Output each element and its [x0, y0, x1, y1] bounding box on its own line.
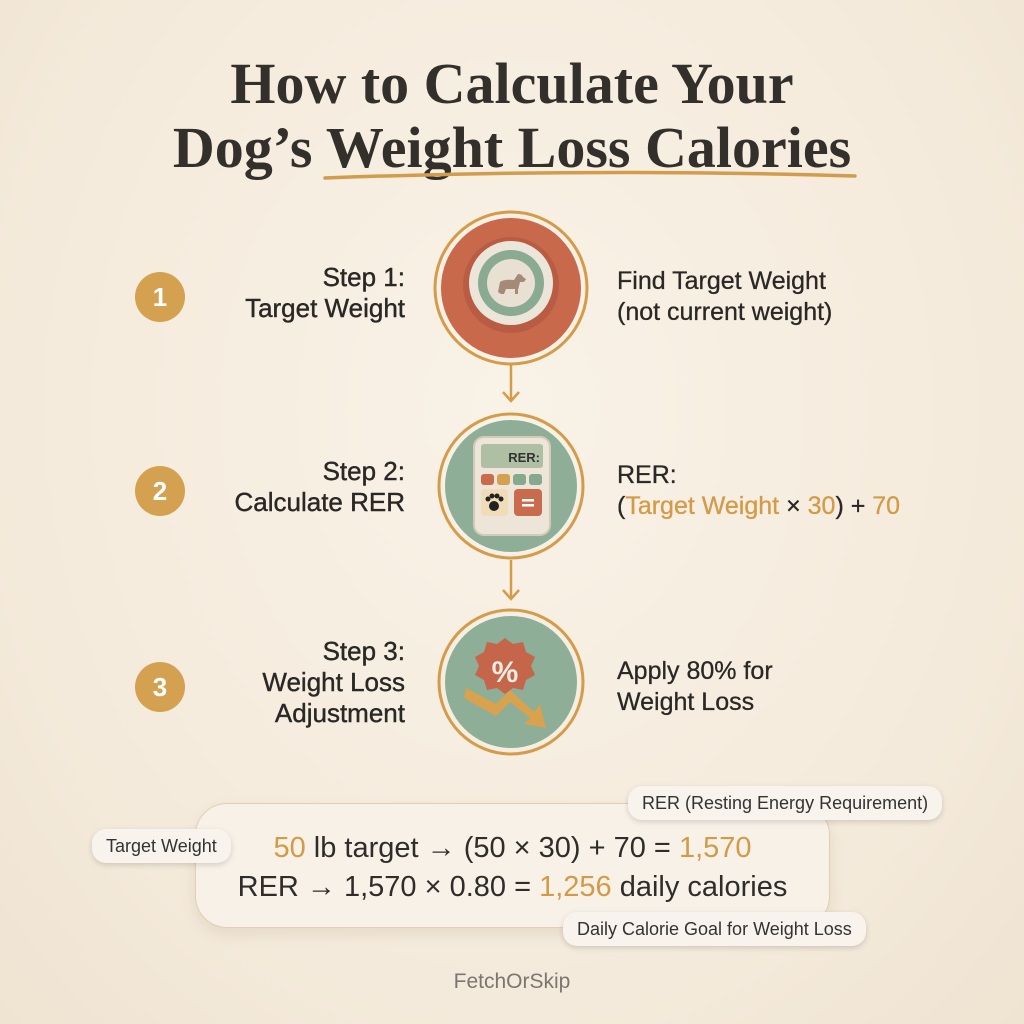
- step 1 description: Find Target Weight: [617, 267, 826, 295]
- step 3 label: Step 3:: [323, 636, 405, 666]
- tag: daily goal: [563, 912, 866, 946]
- step 3 label: Adjustment: [275, 698, 405, 728]
- step 2 description: (Target Weight × 30) + 70: [617, 492, 900, 520]
- step 3 description: [616, 657, 773, 716]
- icon: percent down: [439, 610, 583, 754]
- title: How to Calculate Your: [230, 51, 794, 116]
- icon: target weight dog: [435, 212, 587, 364]
- badge 1: 1: [153, 282, 167, 312]
- step 2 label: Step 2:: [323, 456, 405, 486]
- formula line 2: RER → 1,570 × 0.80 = 1,256 daily calories: [238, 871, 787, 903]
- step 3 description: Weight Loss: [617, 688, 754, 716]
- icon: calculator: [439, 414, 583, 558]
- step 2 description: RER:: [617, 461, 677, 489]
- icon: percent down: %: [492, 656, 518, 689]
- badge 1: [135, 272, 185, 322]
- title underline: [323, 170, 857, 180]
- step 3 description: Apply 80% for: [617, 657, 773, 685]
- badge 3: 3: [153, 672, 167, 702]
- step 2 label: Calculate RER: [234, 487, 405, 517]
- step 1 label: Step 1:: [323, 262, 405, 292]
- tag: RER: RER (Resting Energy Requirement): [642, 793, 928, 813]
- tag: target weight: [92, 829, 231, 863]
- formula line 1: 50 lb target → (50 × 30) + 70 = 1,570: [273, 832, 752, 864]
- icons column: [434, 210, 588, 756]
- step 1 description: [617, 267, 832, 326]
- arrow 1: [503, 364, 519, 401]
- title: Dog’s Weight Loss Calories: [173, 115, 851, 180]
- step 1 label: [245, 262, 405, 323]
- step 2 label: [234, 456, 405, 517]
- tag: target weight: Target Weight: [106, 836, 217, 856]
- icon: calculator: RER:: [508, 450, 540, 465]
- tag: RER: [628, 786, 942, 820]
- step 3 label: Weight Loss: [262, 667, 405, 697]
- formula box: [195, 803, 830, 928]
- footer brand: FetchOrSkip: [454, 970, 570, 993]
- arrow 2: [503, 560, 519, 599]
- step 3 label: [262, 636, 405, 728]
- badge 2: 2: [153, 476, 167, 506]
- step 1 description: (not current weight): [617, 298, 832, 326]
- badge 2: [135, 466, 185, 516]
- step 2 description: [617, 461, 900, 520]
- tag: daily goal: Daily Calorie Goal for Weight Loss: [577, 919, 852, 939]
- step 1 label: Target Weight: [245, 293, 405, 323]
- badge 3: [135, 662, 185, 712]
- title: [173, 51, 851, 180]
